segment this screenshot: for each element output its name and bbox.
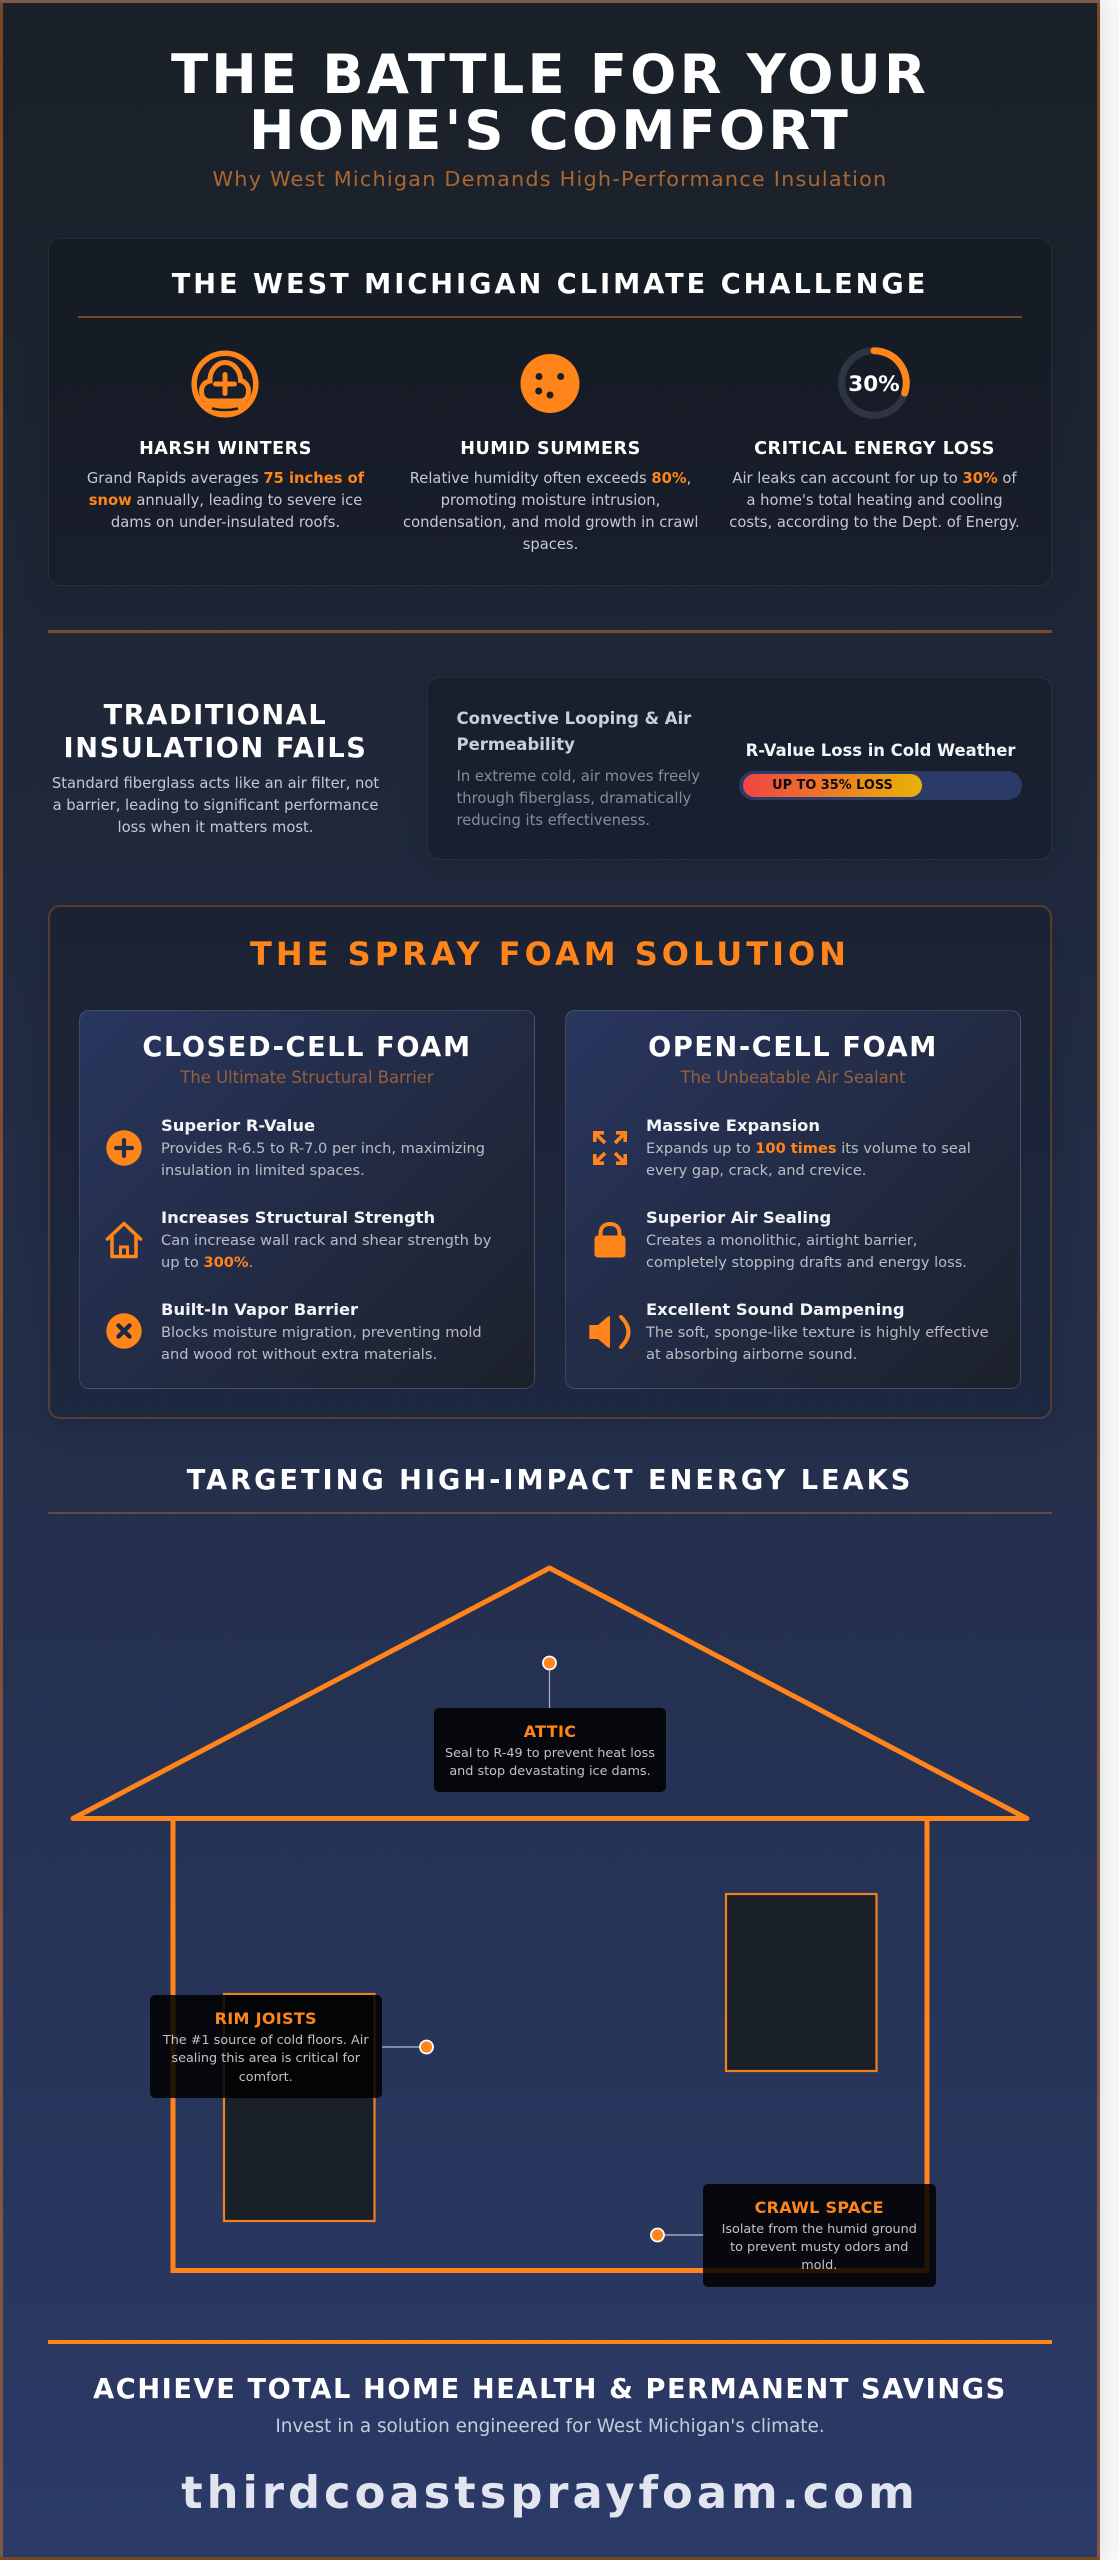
footer heading: ACHIEVE TOTAL HOME HEALTH & PERMANENT SAVINGS [93,2374,1007,2405]
feature text [161,1232,491,1271]
heading: Convective Looping & Air [456,709,691,728]
body text: reducing its effectiveness. [456,812,650,829]
feature: air sealing [594,1208,967,1271]
callout: attic [434,1708,666,1792]
feature: structural strength [106,1208,491,1271]
callout text: comfort. [239,2070,293,2085]
bar fill [743,774,922,797]
icon: plus circle [106,1130,142,1166]
title: HOME'S COMFORT [249,99,851,162]
feature text [646,1324,989,1362]
feature: massive expansion [593,1116,971,1179]
body text [87,470,364,531]
body text: In extreme cold, air moves freely [456,768,700,785]
left window [224,1994,374,2221]
body text [456,768,700,829]
feature text: and wood rot without extra materials. [161,1346,437,1362]
chart: r-value loss bar [739,741,1022,800]
right window [726,1894,876,2071]
feature text: insulation in limited spaces. [161,1162,365,1179]
heading: TRADITIONAL [104,700,327,731]
body text: a home's total heating and cooling [746,492,1003,509]
panel: convective looping [427,677,1052,860]
icon: lock [594,1222,626,1258]
feature text: Creates a monolithic, airtight barrier, [646,1232,917,1249]
house body [173,1818,927,2270]
feature title: Superior Air Sealing [646,1208,831,1227]
body text [52,775,379,836]
subheading: HUMID SUMMERS [460,439,641,459]
heading: climate challenge: THE WEST MICHIGAN CLIMATE CHALLENGE [172,269,928,300]
body text: loss when it matters most. [118,819,313,836]
icon: humidity circle [520,354,580,413]
heading: INSULATION FAILS [64,733,367,764]
callout text: Isolate from the humid ground [722,2222,917,2236]
panel subtitle: The Ultimate Structural Barrier [180,1068,434,1087]
panel: open-cell foam [565,1010,1021,1389]
feature title: Increases Structural Strength [161,1208,435,1227]
body text: condensation, and mold growth in crawl [403,514,698,531]
subheading: CRITICAL ENERGY LOSS [754,439,995,459]
heading: spray foam solution: THE SPRAY FOAM SOLUTION [250,935,850,973]
roof [73,1568,1027,1818]
feature text [161,1324,482,1362]
feature text: Can increase wall rack and shear strength by [161,1232,491,1249]
icon: x circle [106,1313,142,1349]
callout title: CRAWL SPACE [755,2198,884,2217]
chart label: R-Value Loss in Cold Weather [746,741,1015,760]
callout title: RIM JOISTS [215,2009,317,2028]
body text [403,470,698,553]
body text [729,470,1020,531]
body text: promoting moisture intrusion, [441,492,660,509]
callout text: mold. [801,2258,837,2273]
callout text [445,1746,655,1779]
icon: 30% ring [838,347,910,419]
feature: sound dampening [589,1300,989,1362]
feature title: Excellent Sound Dampening [646,1300,905,1318]
body text: a barrier, leading to significant performance [53,797,378,814]
callout: rim joists [150,1995,382,2098]
icon: snow cloud [191,350,259,418]
marker: attic [542,1656,557,1708]
feature text [646,1140,971,1179]
body text: costs, according to the Dept. of Energy. [729,514,1020,531]
panel: spray foam solution [48,905,1052,1419]
feature text: Expands up to 100 times its volume to seal [646,1140,971,1157]
feature title: Superior R-Value [161,1116,315,1135]
feature text: up to 300%. [161,1254,253,1271]
feature: vapor barrier [106,1300,482,1362]
icon: 30% ring: 30% [848,372,900,397]
feature: superior r-value [106,1116,485,1179]
feature text: at absorbing airborne sound. [646,1346,857,1362]
heading [64,700,367,764]
feature title: Built-In Vapor Barrier [161,1300,358,1318]
feature text [161,1140,485,1179]
callout title: ATTIC [524,1722,576,1741]
heading [456,709,692,754]
subtitle: Why West Michigan Demands High-Performance Insulation [213,167,887,191]
body text: Relative humidity often exceeds 80%, [410,470,691,487]
panel: closed-cell foam [79,1010,535,1389]
callout text: sealing this area is critical for [171,2051,360,2066]
heading: energy leaks: TARGETING HIGH-IMPACT ENERGY LEAKS [187,1465,913,1496]
body text: Air leaks can account for up to 30% of [732,470,1017,487]
callout: crawl space [703,2184,936,2287]
icon: expand arrows [593,1131,627,1165]
icon: speaker [589,1314,630,1350]
feature text: Blocks moisture migration, preventing mold [161,1324,482,1340]
text block: convective looping [456,709,700,829]
bar track [739,771,1022,800]
footer subtitle: Invest in a solution engineered for West Michigan's climate. [275,2416,825,2437]
icon: house [106,1222,142,1258]
website url: thirdcoastsprayfoam.com [181,2466,919,2519]
body text: snow annually, leading to severe ice [89,492,362,509]
panel subtitle: The Unbeatable Air Sealant [680,1068,906,1087]
body text: Standard fiberglass acts like an air filter, not [52,775,379,792]
heading: Permeability [456,735,575,754]
callout text [162,2033,369,2085]
callout text: Seal to R-49 to prevent heat loss [445,1746,655,1760]
title: THE BATTLE FOR YOUR [171,43,929,106]
text block: traditional insulation fails [52,700,379,836]
feature text: completely stopping drafts and energy loss. [646,1254,967,1271]
callout text: and stop devastating ice dams. [449,1764,651,1779]
column: humid summers [403,354,698,553]
body text: spaces. [523,536,578,553]
body text: through fiberglass, dramatically [456,790,691,807]
marker: rim joists [382,2040,434,2054]
feature title: Massive Expansion [646,1116,820,1135]
body text: Grand Rapids averages 75 inches of [87,470,364,487]
callout text [703,2220,936,2275]
footer [48,2340,1052,2525]
callout text: to prevent musty odors and [730,2240,908,2255]
column: harsh winters [87,350,364,531]
title [171,43,929,162]
feature text: Provides R-6.5 to R-7.0 per inch, maximizing [161,1140,485,1157]
panel: climate challenge [48,238,1052,586]
feature text: The soft, sponge-like texture is highly effective [646,1324,989,1340]
bar fill: UP TO 35% LOSS [772,778,893,793]
marker: crawl space [649,2226,704,2244]
column: critical energy loss [729,347,1020,531]
panel heading: CLOSED-CELL FOAM [142,1032,472,1063]
feature text: every gap, crack, and crevice. [646,1162,866,1179]
feature text [646,1232,967,1271]
callout text: The #1 source of cold floors. Air [163,2033,369,2048]
body text: dams on under-insulated roofs. [111,514,340,531]
panel heading: OPEN-CELL FOAM [648,1032,938,1063]
subheading: HARSH WINTERS [139,439,312,459]
header [171,43,929,191]
